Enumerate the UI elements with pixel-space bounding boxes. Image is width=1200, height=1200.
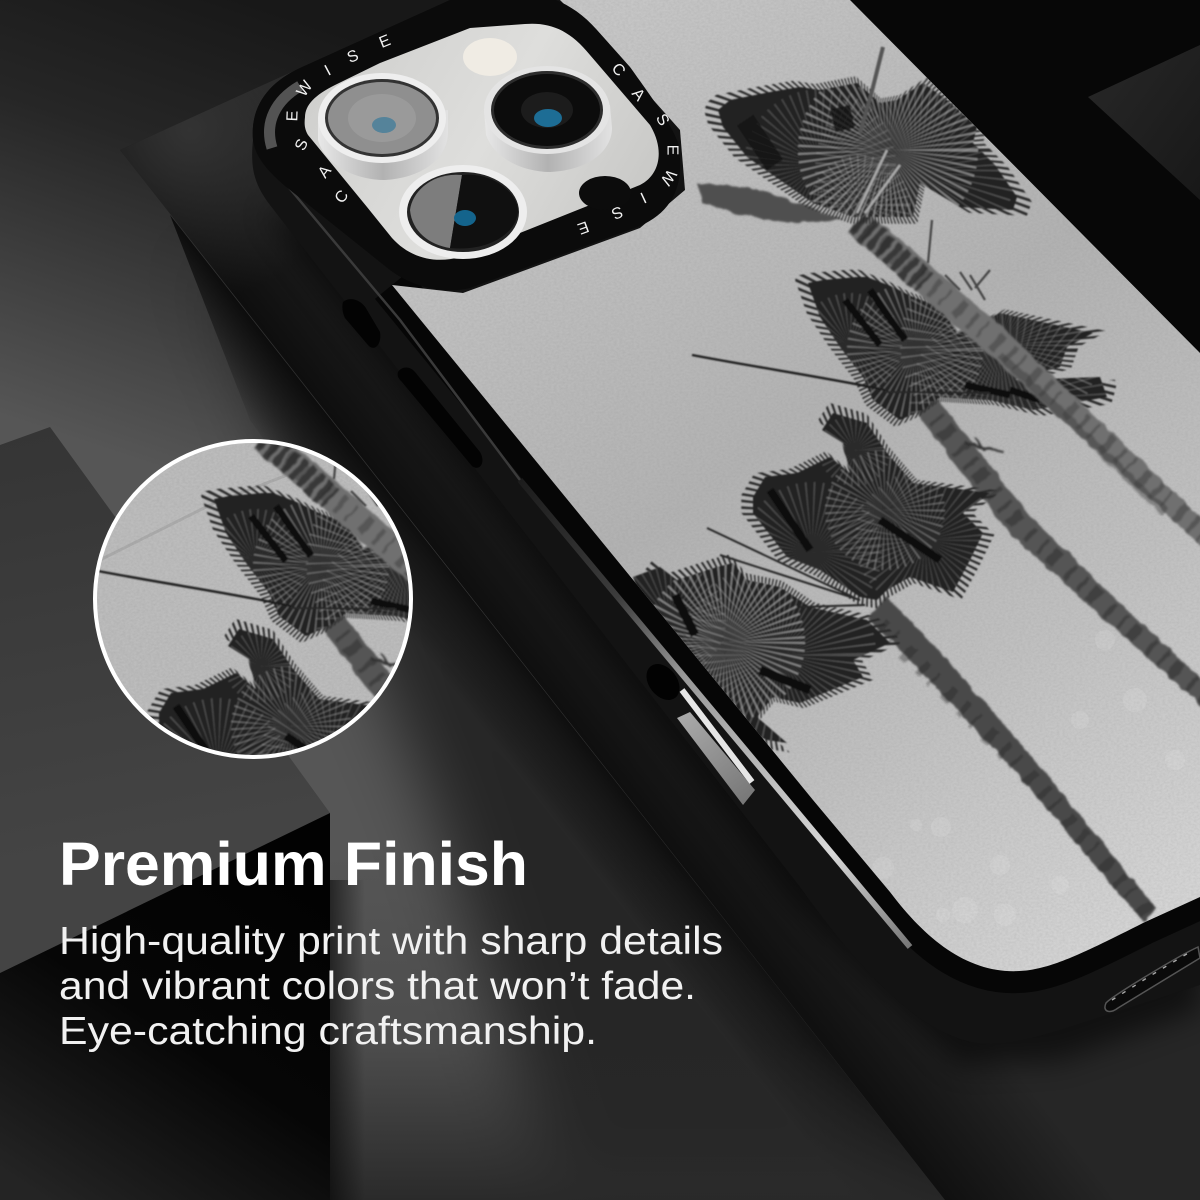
side buttons	[342, 299, 482, 468]
rim highlight strip	[520, 480, 910, 947]
casewise lettering: I	[637, 188, 649, 206]
lower fade	[330, 850, 950, 1200]
description text: High-quality print with sharp details	[59, 920, 723, 963]
casewise lettering	[284, 32, 680, 237]
case body	[252, 0, 1200, 1044]
camera island frame	[253, 0, 680, 290]
heading: Premium Finish	[59, 830, 528, 898]
casewise lettering: E	[377, 32, 393, 52]
soft shade beside block	[330, 880, 365, 1200]
description text: Eye-catching craftsmanship.	[59, 1010, 597, 1053]
palm trees artwork	[633, 47, 1200, 922]
lens bottom	[399, 165, 527, 259]
casewise lettering: S	[292, 137, 312, 153]
slot highlight	[1112, 952, 1190, 1000]
island gray inlay	[270, 86, 300, 148]
casewise lettering: S	[609, 202, 625, 222]
casewise lettering: W	[294, 77, 317, 100]
casewise lettering: A	[628, 85, 648, 105]
flash	[463, 38, 517, 76]
casewise lettering: C	[332, 187, 352, 207]
lens top right	[484, 66, 612, 172]
inset ring	[95, 441, 411, 757]
narrow shadow along platform edge	[170, 215, 945, 1200]
casewise lettering: A	[315, 162, 335, 181]
left block top surface	[0, 427, 330, 973]
casewise lettering: E	[575, 217, 591, 237]
side button facet	[677, 712, 755, 805]
frame seam line	[270, 165, 520, 480]
inner black band	[392, 285, 1200, 971]
charging slot	[1105, 947, 1200, 1011]
inset palm artwork	[99, 443, 409, 755]
description text	[59, 920, 723, 1053]
broad shadow left of platform edge	[200, 250, 945, 1200]
description text: and vibrant colors that won’t fade.	[59, 965, 696, 1008]
back-right block	[1088, 45, 1200, 200]
phone case	[252, 0, 1200, 1012]
dark top-right background	[680, 0, 1200, 520]
inset print	[97, 443, 409, 755]
casewise lettering: S	[345, 47, 361, 67]
casewise lettering: E	[664, 145, 680, 155]
camera glass	[305, 24, 659, 260]
casewise lettering: S	[652, 111, 672, 129]
mic hole	[579, 176, 631, 210]
detail zoom circle	[93, 439, 413, 759]
side button well	[640, 658, 686, 706]
casewise lettering: I	[322, 62, 334, 80]
printed back	[392, 0, 1200, 972]
side button highlight	[682, 690, 752, 782]
phone cast shadow	[265, 210, 1200, 1065]
bokeh dots	[872, 630, 1185, 926]
casewise lettering: E	[284, 110, 302, 122]
casewise lettering: C	[608, 60, 628, 80]
lens top left	[318, 73, 448, 180]
left block front face	[0, 813, 330, 1200]
casewise lettering: W	[656, 166, 679, 189]
